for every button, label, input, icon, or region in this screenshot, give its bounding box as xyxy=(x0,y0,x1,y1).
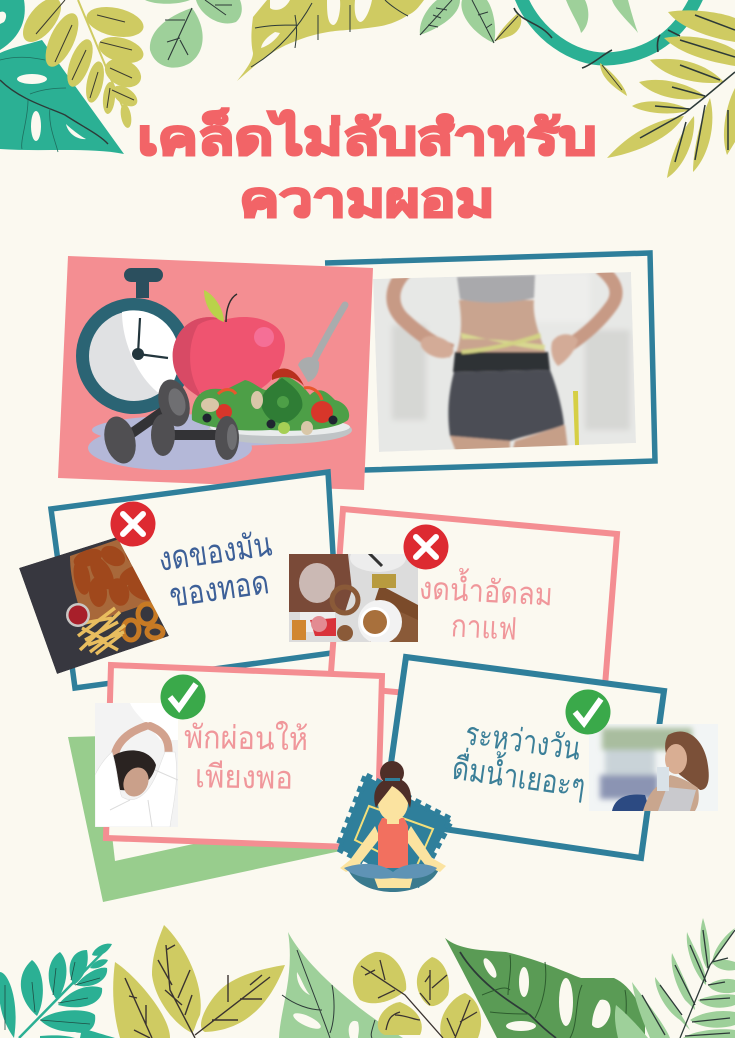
text: no fatty, no fried: งดของมัน xyxy=(156,525,274,578)
bottom foliage: light green fern xyxy=(632,918,735,1038)
lavender shadow xyxy=(88,414,348,470)
bottom foliage: light green monstera xyxy=(279,932,403,1038)
text: no fatty, no fried xyxy=(156,525,274,614)
woman figure xyxy=(340,761,446,892)
icon: stopwatch xyxy=(76,268,192,414)
card: no soda or coffee xyxy=(330,509,617,711)
yoga mat xyxy=(338,776,451,888)
text: drink plenty of water: ดื่มน้ำเยอะๆ xyxy=(450,745,588,804)
title: ความผอม xyxy=(240,174,494,227)
top-right teal vine ring xyxy=(514,0,698,96)
photo: woman stretching in bed xyxy=(95,703,178,827)
text: no fatty, no fried: ของทอด xyxy=(167,563,271,614)
text: no soda, coffee: กาแฟ xyxy=(450,608,518,647)
text: drink plenty of water: ระหว่างวัน xyxy=(463,715,583,767)
photo: woman drinking water xyxy=(589,724,718,811)
teal photo frame with waist measuring photo xyxy=(325,253,655,470)
top-right palm branch xyxy=(607,10,735,178)
icon: green check 2 xyxy=(566,690,610,734)
text: no soda, coffee xyxy=(418,566,554,647)
icon: dumbbells xyxy=(99,376,239,467)
card: enough rest xyxy=(106,665,382,848)
pink panel with clock, apple, salad and dumbbells xyxy=(58,256,373,490)
icon: apple xyxy=(173,290,285,400)
icon: salad plate xyxy=(192,369,352,444)
text: rest enough: เพียงพอ xyxy=(195,758,293,796)
text: no soda, coffee: งดน้ำอัดลม xyxy=(418,566,554,612)
bottom foliage: dark green monstera xyxy=(445,938,648,1038)
bottom foliage: round olive leaves xyxy=(353,952,481,1038)
card: no fatty food xyxy=(51,472,339,688)
card: drink water xyxy=(383,657,664,858)
icon: red cross 2 xyxy=(404,524,448,570)
bottom foliage: teal fern xyxy=(0,944,115,1038)
yoga woman on mat xyxy=(338,761,451,892)
icon: red cross 1 xyxy=(110,502,156,546)
icon: fork xyxy=(298,305,345,382)
text: rest enough: พักผ่อนให้ xyxy=(184,719,308,757)
photo: cafe table with coffee and juice xyxy=(289,554,418,642)
top-left foliage xyxy=(0,0,242,154)
top-centre small leaves xyxy=(420,0,521,43)
title: เคล็ดไม่ลับสำหรับ xyxy=(138,108,596,165)
photo: fried chicken and fries xyxy=(19,536,169,674)
icon: green check 1 xyxy=(160,674,206,720)
text: rest enough xyxy=(184,719,308,796)
title xyxy=(138,108,596,227)
green back panel xyxy=(68,720,345,902)
bottom foliage: olive leaves xyxy=(113,925,285,1038)
top-centre monstera leaf xyxy=(237,0,424,81)
photo: waist measurement xyxy=(373,268,636,452)
text: drink plenty of water xyxy=(450,715,588,804)
